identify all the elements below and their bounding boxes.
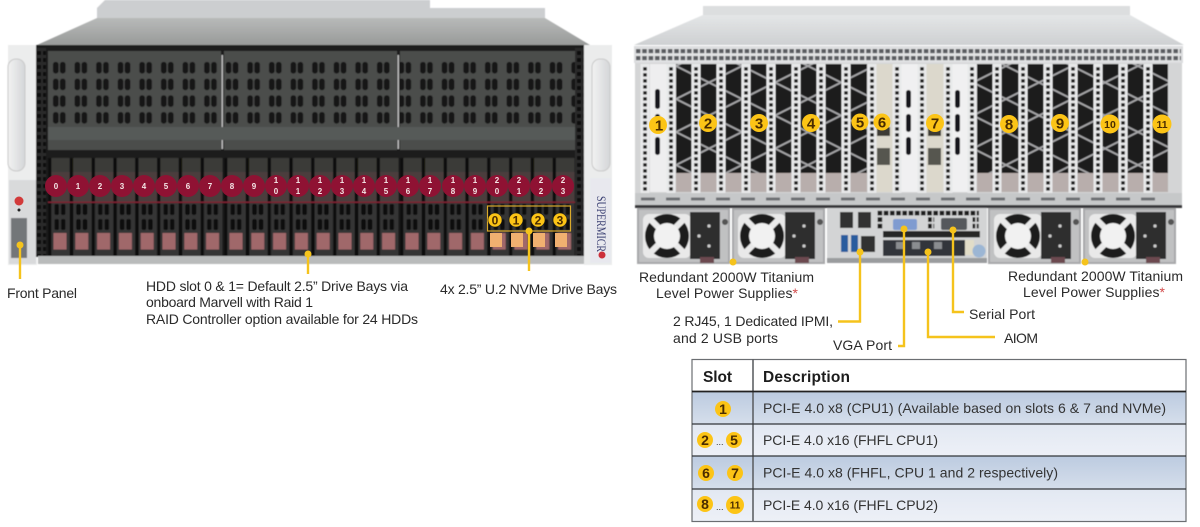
NVMe drive highlight: 1 <box>513 214 520 228</box>
brand wordmark: SUPERMICR <box>594 196 609 252</box>
arrow: serial leader <box>950 226 964 312</box>
drive slot numbers: 3 <box>340 187 345 196</box>
label: HDD bays <box>146 278 418 327</box>
drive slot numbers: 8 <box>451 187 456 196</box>
label: front panel: Front Panel <box>7 285 77 301</box>
blank plate <box>952 64 968 192</box>
arrow: AIOM leader <box>924 248 995 337</box>
drive slot numbers: 2 <box>517 176 522 185</box>
row: slots 6 and 7: 7 <box>731 465 739 481</box>
label: network ports <box>673 313 833 346</box>
rear slot numbers: 6 <box>878 114 886 132</box>
label: HDD bays: RAID Controller option available for 24 HDDs <box>146 311 418 327</box>
drive slot numbers: 7 <box>208 182 213 191</box>
perforated slot strips <box>640 64 1152 193</box>
label: right power supplies: Level Power Supplies* <box>1023 284 1166 300</box>
row: slots 2 to 5: PCI-E 4.0 x16 (FHFL CPU1) <box>763 432 938 448</box>
label: HDD bays: onboard Marvell with Raid 1 <box>146 294 313 310</box>
row: slots 8 to 11: 8 <box>701 496 709 512</box>
front top lid <box>37 0 590 45</box>
drive slot numbers: 7 <box>428 187 433 196</box>
arrow: HDD leader <box>304 250 312 274</box>
right rack handle <box>584 45 612 265</box>
drive slot numbers: 1 <box>76 182 81 191</box>
table header: Slot <box>703 369 732 386</box>
rear slot numbers <box>649 114 1172 134</box>
table row backgrounds <box>692 359 1186 521</box>
label: network ports: and 2 USB ports <box>673 330 778 346</box>
NVMe drive highlight: 2 <box>535 214 542 228</box>
drive slot numbers: 5 <box>164 182 169 191</box>
drive slot numbers: 1 <box>318 176 323 185</box>
label: VGA port: VGA Port <box>833 337 892 353</box>
NVMe drive highlight: 3 <box>557 214 564 228</box>
row: slots 2 to 5: 5 <box>730 432 738 448</box>
table header: Description <box>763 369 850 386</box>
rear I/O panel <box>827 208 987 263</box>
drive slot numbers: 0 <box>495 187 500 196</box>
row: slot 1: 1 <box>719 401 727 417</box>
label: serial port: Serial Port <box>969 306 1035 322</box>
rear slot numbers: 5 <box>856 114 864 132</box>
front bottom rail <box>38 256 584 264</box>
rear slot numbers: 8 <box>1005 116 1013 134</box>
rear top lid <box>634 6 1184 45</box>
arrow: NVMe leader <box>526 228 532 271</box>
arrow: network and USB leader <box>838 248 864 322</box>
blank plate <box>900 64 918 192</box>
label: right power supplies: Redundant 2000W Titanium <box>1008 268 1183 284</box>
rear slot numbers: 10 <box>1104 119 1116 131</box>
rear slot area <box>635 63 1182 193</box>
drive slot numbers: 1 <box>340 176 345 185</box>
row: slots 8 to 11 <box>697 496 938 514</box>
drive slot numbers: 2 <box>539 176 544 185</box>
drive slot numbers: 8 <box>230 182 235 191</box>
arrow: right power supply marker <box>1082 258 1088 266</box>
row: slots 2 to 5: ... <box>716 437 724 447</box>
rear slot numbers: 4 <box>807 116 816 132</box>
drive slot numbers: 1 <box>384 176 389 185</box>
table: slot descriptions <box>692 359 1186 522</box>
rear slot numbers: 2 <box>704 116 712 132</box>
drive slot numbers: 1 <box>296 187 301 196</box>
row: slots 8 to 11: PCI-E 4.0 x16 (FHFL CPU2) <box>763 497 938 513</box>
row: slot 1: PCI-E 4.0 x8 (CPU1) (Available based on slots 6 & 7 and NVMe) <box>763 400 1166 416</box>
rear expansion openings <box>676 64 1168 192</box>
slot 7 card <box>926 64 945 192</box>
drive slot numbers: 1 <box>362 176 367 185</box>
row: slots 8 to 11: 11 <box>730 500 741 512</box>
drive slot numbers: 2 <box>539 187 544 196</box>
row: slots 8 to 11: ... <box>716 502 724 512</box>
label: left power supplies: Level Power Supplies* <box>656 285 799 301</box>
NVMe drive highlight <box>488 206 570 247</box>
drive slot numbers: 1 <box>428 176 433 185</box>
row: slots 2 to 5: 2 <box>701 432 709 448</box>
drive slot numbers: 2 <box>495 176 500 185</box>
drive blanks panels <box>48 51 575 150</box>
drive slot numbers: 3 <box>120 182 125 191</box>
label: HDD bays: HDD slot 0 & 1= Default 2.5” Drive Bays via <box>146 278 408 294</box>
rear slot numbers: 9 <box>1056 116 1064 132</box>
arrow: VGA leader <box>898 226 908 346</box>
power supply 3 <box>988 208 1081 264</box>
front bezel <box>36 45 584 257</box>
drive slot numbers: 1 <box>451 176 456 185</box>
front server chassis <box>8 0 612 265</box>
table header <box>703 369 850 386</box>
drive slot numbers: 2 <box>318 187 323 196</box>
left rack handle <box>8 45 37 265</box>
drive slot numbers: 9 <box>473 187 478 196</box>
drive slot numbers: 9 <box>252 182 257 191</box>
drive slot numbers: 2 <box>561 176 566 185</box>
label: left power supplies <box>639 269 814 301</box>
rear slot numbers: 11 <box>1156 119 1168 131</box>
drive bays <box>48 158 575 256</box>
power supply 1 <box>637 208 730 264</box>
drive slot numbers: 4 <box>362 187 367 196</box>
rear slot numbers: 7 <box>931 116 939 132</box>
drive slot numbers: 1 <box>473 176 478 185</box>
label: right power supplies <box>1008 268 1183 300</box>
drive slot numbers <box>45 175 574 197</box>
rear server chassis <box>634 6 1184 264</box>
power supply 4 <box>1083 208 1176 264</box>
label: NVMe bays: 4x 2.5” U.2 NVMe Drive Bays <box>440 281 617 297</box>
label: left power supplies: Redundant 2000W Titanium <box>639 269 814 285</box>
drive slot numbers: 3 <box>561 187 566 196</box>
table borders <box>692 359 1186 522</box>
drive slot numbers: 4 <box>142 182 147 191</box>
drive slot numbers: 1 <box>517 187 522 196</box>
row: slots 6 and 7: 6 <box>702 465 710 481</box>
drive slot numbers: 5 <box>384 187 389 196</box>
rear slot numbers: 3 <box>755 116 763 132</box>
arrow: front panel leader <box>16 242 24 279</box>
power supply 2 <box>732 208 825 264</box>
drive slot numbers: 0 <box>54 182 59 191</box>
drive slot numbers: 1 <box>296 176 301 185</box>
row: slots 6 and 7: PCI-E 4.0 x8 (FHFL, CPU 1 and 2 respectively) <box>763 464 1058 480</box>
drive slot numbers: 1 <box>406 176 411 185</box>
label: AIOM: AIOM <box>1004 330 1038 346</box>
icon: power button <box>14 196 24 212</box>
drive slot numbers: 2 <box>98 182 103 191</box>
rear slot numbers: 1 <box>655 118 663 134</box>
rear vent band <box>634 46 1183 63</box>
drive slot numbers: 0 <box>274 187 279 196</box>
arrow: left power supply marker <box>730 258 736 266</box>
slot 1 plate <box>650 64 667 192</box>
drive slot numbers: 6 <box>186 182 191 191</box>
drive slot numbers: 6 <box>406 187 411 196</box>
drive slot numbers: 1 <box>274 176 279 185</box>
slot 6 card <box>876 64 896 192</box>
rear clip rail <box>635 193 1182 208</box>
label: network ports: 2 RJ45, 1 Dedicated IPMI, <box>673 313 833 329</box>
NVMe drive highlight: 0 <box>492 214 499 228</box>
